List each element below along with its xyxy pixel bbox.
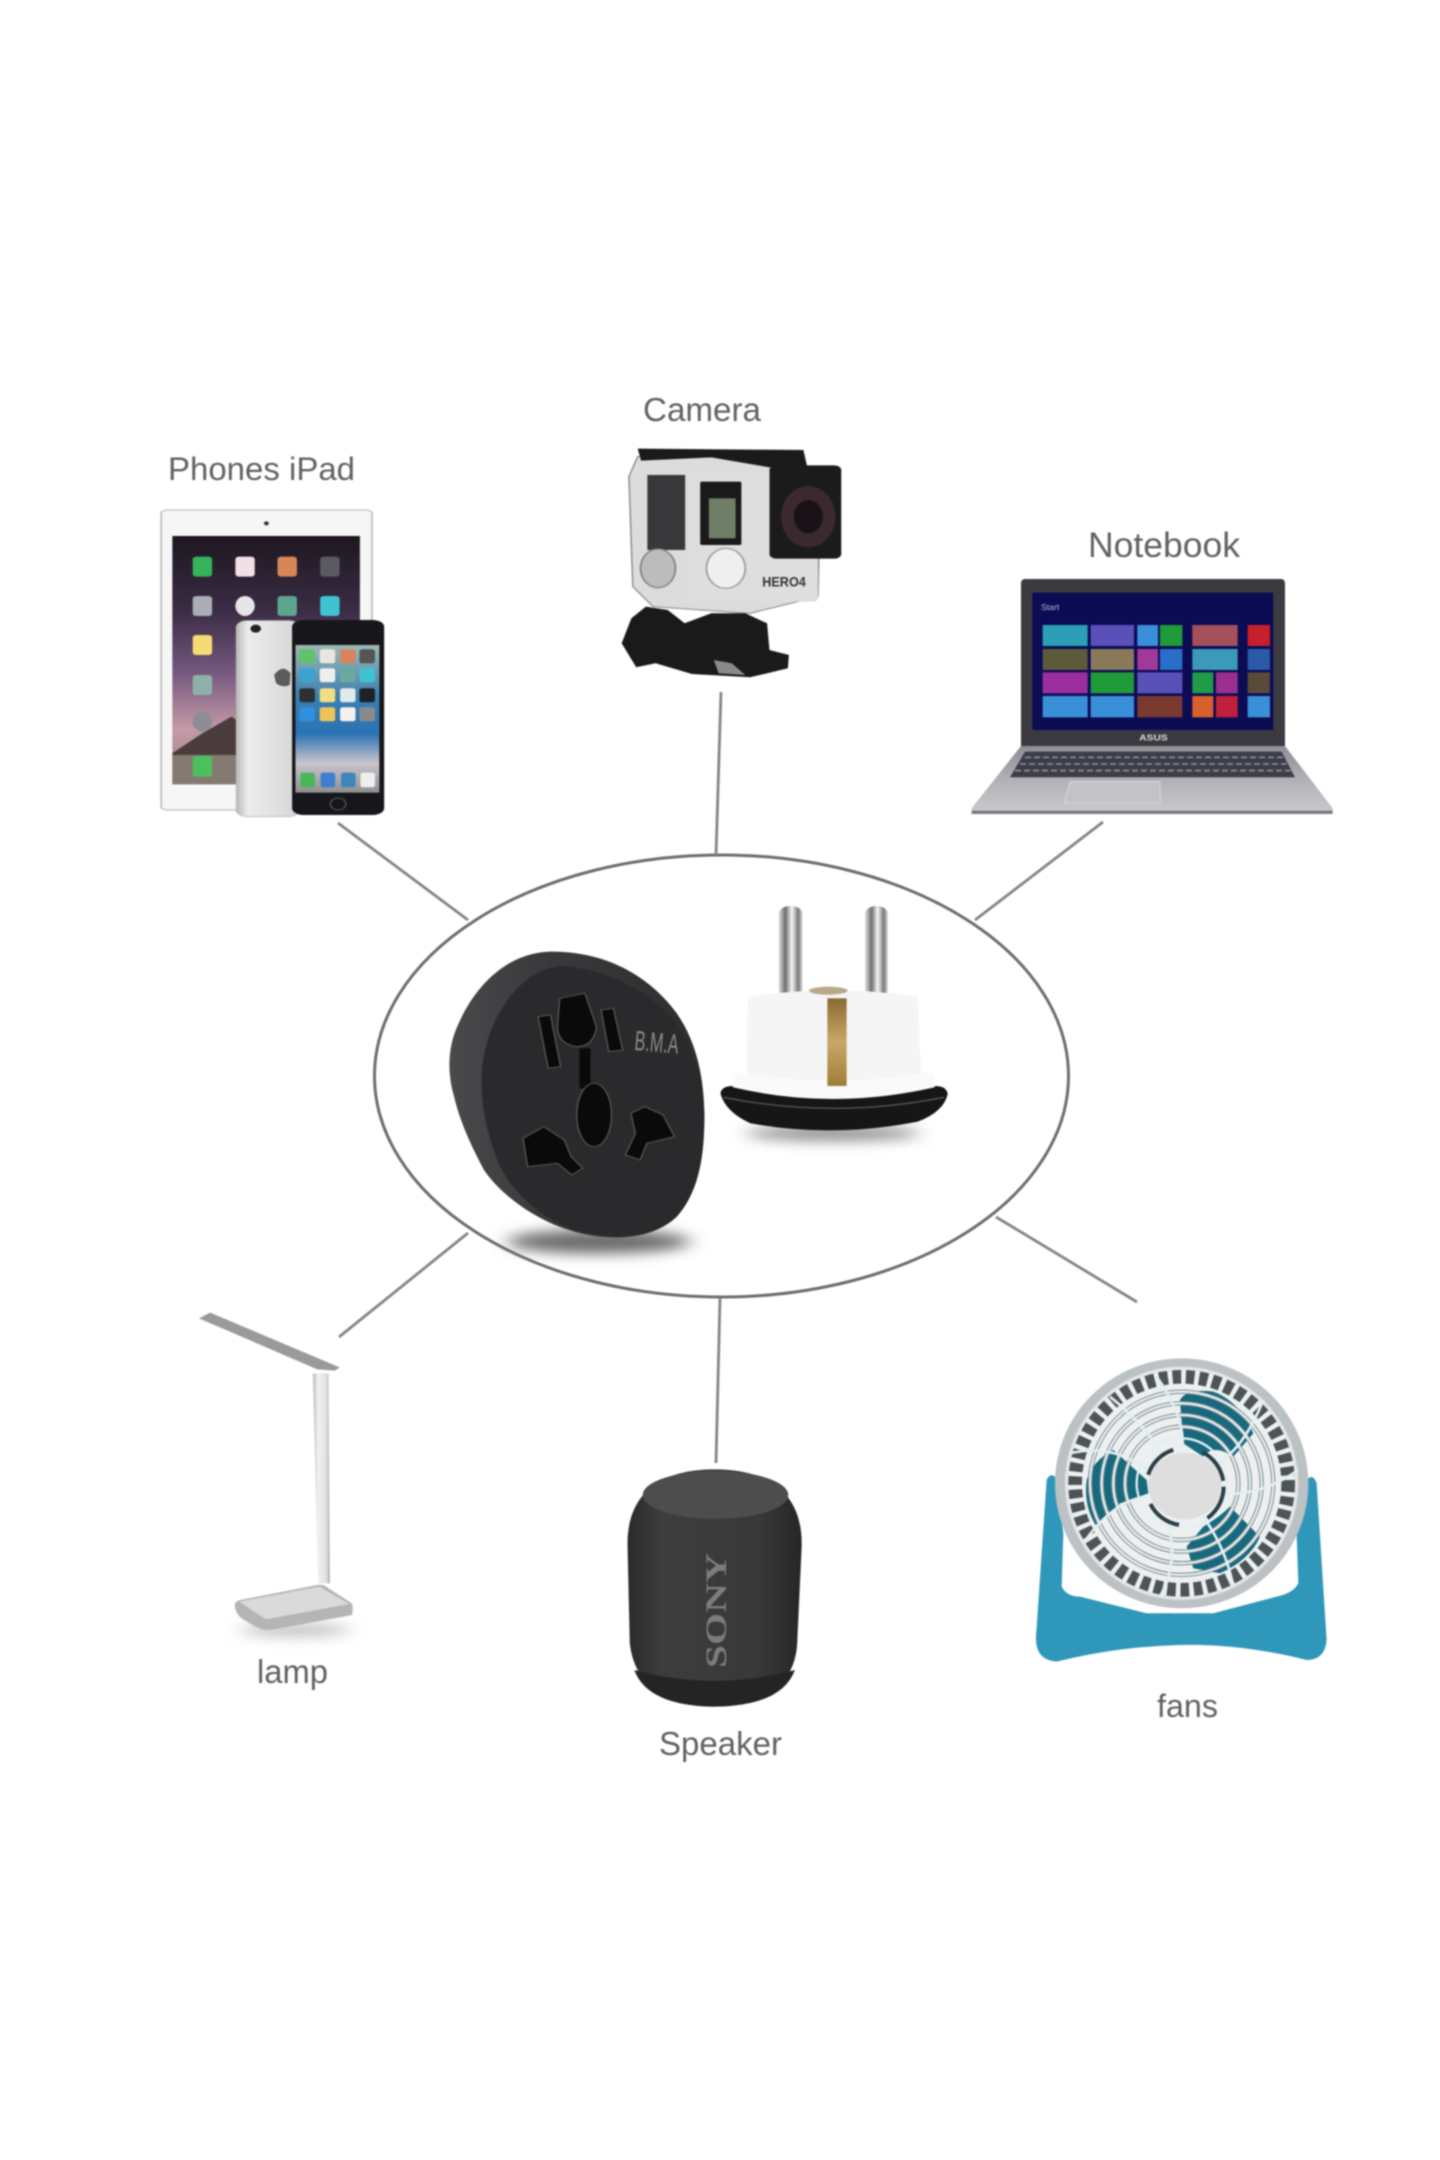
radial wires [1070, 1377, 1298, 1597]
pin two [865, 906, 888, 998]
black base [720, 1086, 948, 1130]
mount [622, 607, 789, 677]
adapter: black socket front [449, 952, 704, 1254]
central ellipse [374, 855, 1068, 1297]
stand [1036, 1475, 1327, 1662]
speaker body [628, 1469, 802, 1707]
speaker top [643, 1471, 788, 1519]
icon: speaker [628, 1469, 802, 1707]
iPad [161, 510, 372, 810]
label: Notebook: Notebook [1088, 526, 1241, 565]
blades [1086, 1391, 1260, 1573]
head [199, 1313, 340, 1371]
hub [1148, 1453, 1222, 1519]
base lip [724, 1097, 944, 1108]
dark inner ring [1146, 1448, 1224, 1525]
grille background [1067, 1368, 1297, 1598]
flange [733, 1073, 935, 1099]
keyboard [1010, 752, 1295, 777]
pole [313, 1373, 330, 1583]
dark side [647, 475, 685, 550]
label: Camera: Camera [643, 391, 762, 428]
body [747, 990, 921, 1081]
lens block [769, 465, 841, 559]
key rows [1015, 757, 1291, 771]
top clip [638, 449, 807, 467]
lid [1021, 579, 1285, 747]
screen text: Start [1041, 602, 1060, 612]
silver body [690, 473, 818, 602]
lens [781, 486, 835, 547]
base edge [972, 811, 1333, 814]
wire shadows [1090, 1392, 1273, 1575]
silver iPhone [236, 621, 299, 817]
rim [449, 952, 704, 1237]
connector lines [338, 692, 1137, 1463]
holes [523, 993, 674, 1175]
side button [641, 549, 675, 588]
outer ring [1055, 1358, 1308, 1608]
touchpad [1064, 782, 1160, 803]
icon: iPad and iPhones [161, 510, 384, 817]
mount highlight [714, 660, 745, 675]
label: fans: fans [1157, 1688, 1218, 1724]
shadow [746, 1126, 920, 1141]
icon: action camera [622, 449, 841, 677]
icon: fan [1036, 1358, 1327, 1662]
dark rim ring [1075, 1377, 1288, 1590]
screen tiles [1043, 625, 1270, 717]
base [235, 1585, 353, 1630]
shadow [507, 1230, 691, 1254]
screen [1032, 593, 1273, 730]
label: Speaker: Speaker [659, 1725, 782, 1762]
HERO4 mark: HERO4 [762, 574, 806, 590]
adapter: white schuko plug [720, 906, 948, 1141]
speaker logo: SONY [700, 1553, 733, 1668]
button [706, 548, 745, 588]
brand: ASUS [1139, 734, 1168, 743]
concentric wires [1067, 1368, 1297, 1598]
gold contact [827, 998, 847, 1086]
base [972, 746, 1333, 814]
base top [239, 1587, 349, 1619]
housing [629, 457, 819, 613]
black iPhone [292, 620, 384, 815]
label: Phones iPad: Phones iPad [168, 451, 355, 487]
bottom band [634, 1670, 795, 1707]
pins [779, 906, 803, 998]
icon: laptop [972, 579, 1333, 814]
lamp shadow [239, 1624, 351, 1636]
icon: desk lamp [199, 1313, 353, 1636]
label: lamp: lamp [257, 1653, 328, 1690]
face [482, 966, 704, 1236]
top recess [809, 987, 848, 995]
adapter brand text: B.M.A [633, 1025, 680, 1060]
lcd [700, 482, 741, 545]
